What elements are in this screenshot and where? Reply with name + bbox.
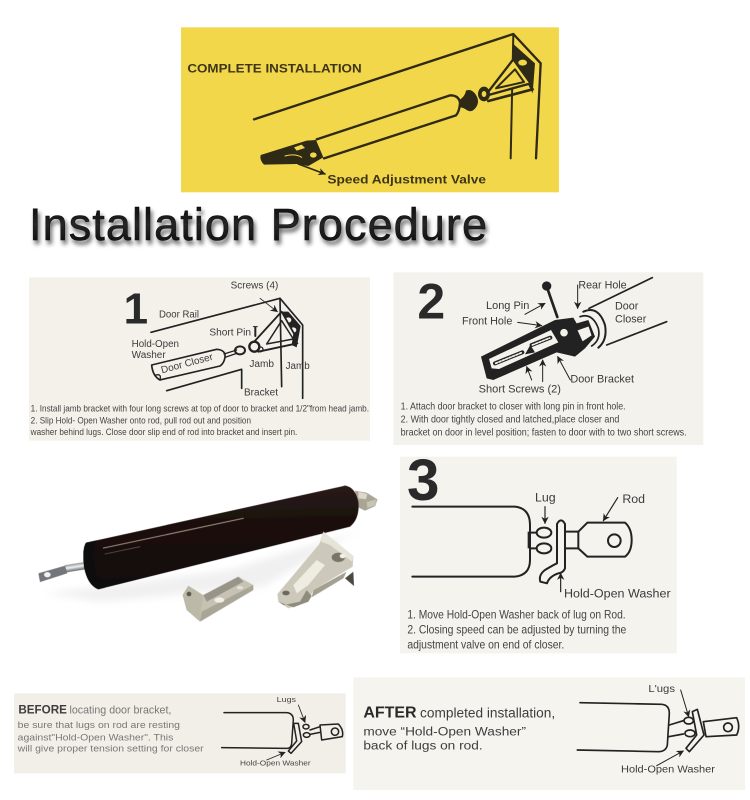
after labels [621,684,716,776]
step 2 instructions: 2. With door tightly closed and latched,place closer and [401,415,619,426]
step 1 labels: Jamb [286,361,310,372]
step 3 instructions [407,609,626,652]
step 2 instructions: 1. Attach door bracket to closer with long pin in front hole. [401,402,626,413]
tube highlights [103,518,243,554]
step 1 instructions: 1. Install jamb bracket with four long screws at top of door to bracket and 1/2"from head jamb. [31,404,369,414]
before instructions: BEFORE locating door bracket, [18,704,171,717]
after labels: L'ugs [648,684,675,695]
after labels: Hold-Open Washer [621,765,716,776]
before instructions: be sure that lugs on rod are resting [18,720,180,730]
title: Installation Procedure [29,199,487,250]
after instructions [363,705,555,753]
ground shadow [43,527,363,602]
after instructions: back of lugs on rod. [363,739,483,753]
yellow panel background [181,27,559,192]
step 3 labels: Rod [622,492,645,506]
step 2 labels: Closer [615,313,647,325]
step 2 instructions [401,402,687,439]
jamb bracket [485,44,535,101]
step 2 instructions: bracket on door in level position; fasten to door with to two short screws. [401,428,687,439]
step 1 labels: Door Rail [159,309,199,320]
panel: step 1 [29,277,370,441]
panel: step 2 [393,272,703,445]
step 1 labels: Door Closer [160,352,215,376]
step number 1: 1 [124,284,148,333]
step 2 labels: Door Bracket [570,373,634,385]
step 1 instructions [30,404,369,437]
speed adjustment valve [260,140,323,166]
door frame lines [254,34,541,158]
after diagram [577,690,739,766]
step 3 labels: Hold-Open Washer [564,587,671,601]
step 3 labels [535,491,671,601]
step 2 labels: Short Screws (2) [479,384,561,396]
jamb bracket [277,532,354,608]
rear mounting tabs [355,491,377,511]
before labels: Hold-Open Washer [240,758,311,767]
panel: after [353,677,745,790]
step 3 instructions: 2. Closing speed can be adjusted by turning the [407,624,626,637]
step 2 labels [462,279,647,396]
door bracket [183,577,253,622]
closer rod [38,561,93,582]
step 1 labels: Washer [132,350,166,361]
before instructions: against"Hold-Open Washer". This [18,732,174,742]
closer tube [83,486,359,589]
before background [14,693,346,773]
arrow to valve [298,164,325,174]
after background [353,677,745,790]
step 2 diagram [481,278,667,382]
panel: complete installation [181,27,559,192]
step 1 labels: Jamb [249,359,274,370]
before instructions [17,704,204,753]
step 2 labels: Front Hole [462,316,512,328]
step 1 labels [132,281,310,399]
step 1 diagram [151,298,303,398]
before labels [240,695,311,767]
after instructions: AFTER completed installation, [363,705,555,722]
step 1 labels: Short Pin [209,327,251,338]
photo: door closer and brackets [38,486,377,622]
step 2 labels: Rear Hole [578,279,627,291]
step 3 instructions: adjustment valve on end of closer. [407,639,564,652]
step 1 background [29,277,370,441]
heading: complete installation: COMPLETE INSTALLATION [187,62,362,76]
after instructions: move “Hold-Open Washer” [363,724,526,738]
step 1 labels: Hold-Open [132,339,179,350]
step 2 background [393,272,703,445]
closer neck and lugs [459,87,490,111]
step 2 labels: Door [615,300,639,312]
step 1 labels: Screws (4) [231,281,278,292]
step 3 diagram [412,498,632,592]
before instructions: will give proper tension setting for closer [17,743,204,753]
step 2 labels: Long Pin [486,300,529,312]
step 3 background [400,457,677,653]
before diagram [222,705,343,760]
door closer body [317,95,460,158]
label: speed adjustment valve: Speed Adjustment Valve [327,172,486,186]
step 1 labels: Bracket [244,388,278,399]
step 3 instructions: 1. Move Hold-Open Washer back of lug on Rod. [407,609,626,622]
step 1 instructions: washer behind lugs. Close door slip end of rod into bracket and insert pin. [30,427,297,437]
step 1 instructions: 2. Slip Hold- Open Washer onto rod, pull rod out and position [31,415,251,425]
step number 2: 2 [417,273,445,329]
before labels: Lugs [277,695,296,704]
step number 3: 3 [407,448,439,513]
tube end cap [83,540,105,589]
panel: step 3 [400,448,677,653]
panel: before [14,693,346,773]
step 3 labels: Lug [535,491,556,505]
